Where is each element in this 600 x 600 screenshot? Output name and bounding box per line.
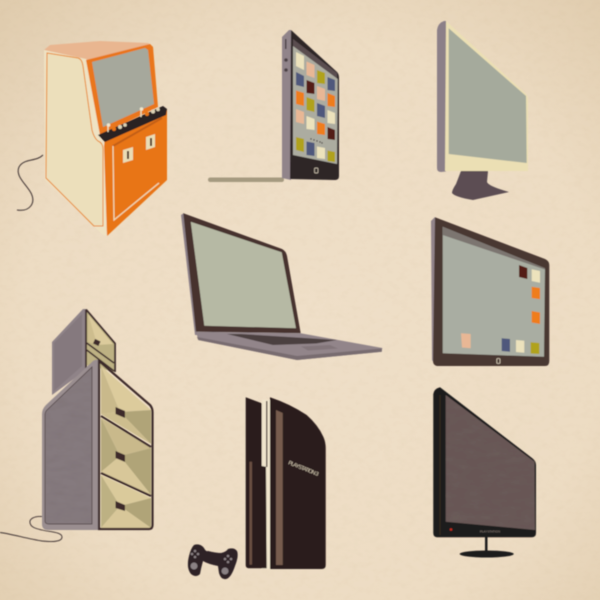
- console left stripe: [250, 462, 252, 565]
- laptop touchpad: [301, 345, 338, 350]
- tv power light: [450, 528, 452, 531]
- laptop lid edge: [181, 213, 198, 335]
- front tower side inner: [45, 367, 92, 524]
- tablet status strip: [443, 227, 545, 270]
- laptop screen: [191, 222, 296, 328]
- phone ground shadow: [208, 178, 284, 182]
- rear tower side inner: [54, 314, 82, 391]
- drawer 3: [101, 475, 151, 528]
- arcade side panel: [44, 50, 107, 236]
- tablet app icons: [461, 265, 540, 354]
- device: tablet landscape: [431, 217, 549, 366]
- console cream slot: [262, 400, 270, 569]
- laptop keyboard: [227, 334, 337, 345]
- phone body: [290, 30, 339, 180]
- tablet body: [433, 217, 549, 366]
- phone top strip: [293, 39, 337, 79]
- arcade side trim: [46, 53, 103, 226]
- monitor frame: [445, 21, 528, 171]
- arcade screen: [92, 48, 154, 127]
- device: desktop monitor: [437, 21, 528, 200]
- tv stand: [460, 536, 514, 558]
- device: laptop: [181, 213, 382, 360]
- monitor screen: [449, 28, 527, 163]
- tablet home button: [497, 358, 500, 364]
- rear tower side: [52, 309, 86, 395]
- controller body: [188, 544, 238, 579]
- rear tower front: [86, 310, 115, 372]
- arcade lower panel trim: [113, 118, 162, 146]
- side buttons: [284, 39, 288, 72]
- phone home button: [314, 168, 318, 173]
- front tower side: [42, 360, 98, 530]
- laptop base: [196, 332, 382, 360]
- console right half: [270, 397, 326, 569]
- device: flat television: [433, 387, 536, 558]
- drawer dividers: [101, 416, 151, 447]
- page dots: [310, 138, 323, 144]
- drawer 2: [101, 418, 151, 495]
- arcade coin slots: [123, 134, 155, 163]
- arcade lower front: [104, 110, 167, 236]
- monitor side edge: [437, 21, 446, 172]
- front tower drawers: [99, 361, 152, 529]
- tv body: [433, 387, 536, 537]
- arcade top panel: [44, 41, 151, 60]
- tv screen wear texture: [446, 395, 535, 530]
- console logo: PLAYSTATION 3: [287, 460, 319, 478]
- device: game console: [246, 397, 326, 569]
- tv brand: PLAYSTATION: [480, 530, 500, 534]
- tablet side edge: [431, 217, 436, 366]
- arcade control bar: [98, 106, 167, 142]
- laptop lid: [183, 213, 301, 333]
- arcade upper front: [86, 44, 158, 135]
- console left half: [246, 397, 267, 568]
- laptop front edge: [197, 337, 382, 360]
- console upper divider: [266, 401, 267, 467]
- phone screen: [293, 46, 338, 164]
- drawer 1: [101, 366, 151, 444]
- device: arcade cabinet: [17, 41, 167, 236]
- app icons: [296, 52, 335, 162]
- console right stripe: [276, 410, 283, 565]
- monitor stand: [452, 171, 509, 200]
- game controller: [188, 544, 238, 579]
- arcade joystick and buttons left: [107, 123, 127, 132]
- tablet screen: [443, 227, 545, 357]
- device: phone-style tablet upright: [208, 30, 339, 182]
- arcade power cable: [17, 155, 43, 210]
- arcade joystick and buttons right: [140, 107, 160, 117]
- tower cable: [0, 516, 62, 542]
- front tower outline: [99, 361, 152, 529]
- controller sticks and pads: [190, 550, 232, 574]
- phone side edge: [282, 30, 291, 180]
- tv screen: [446, 395, 535, 530]
- device: twin speaker towers: [0, 309, 152, 542]
- tv edge seam: [439, 395, 441, 535]
- tower side wear texture: [45, 367, 92, 524]
